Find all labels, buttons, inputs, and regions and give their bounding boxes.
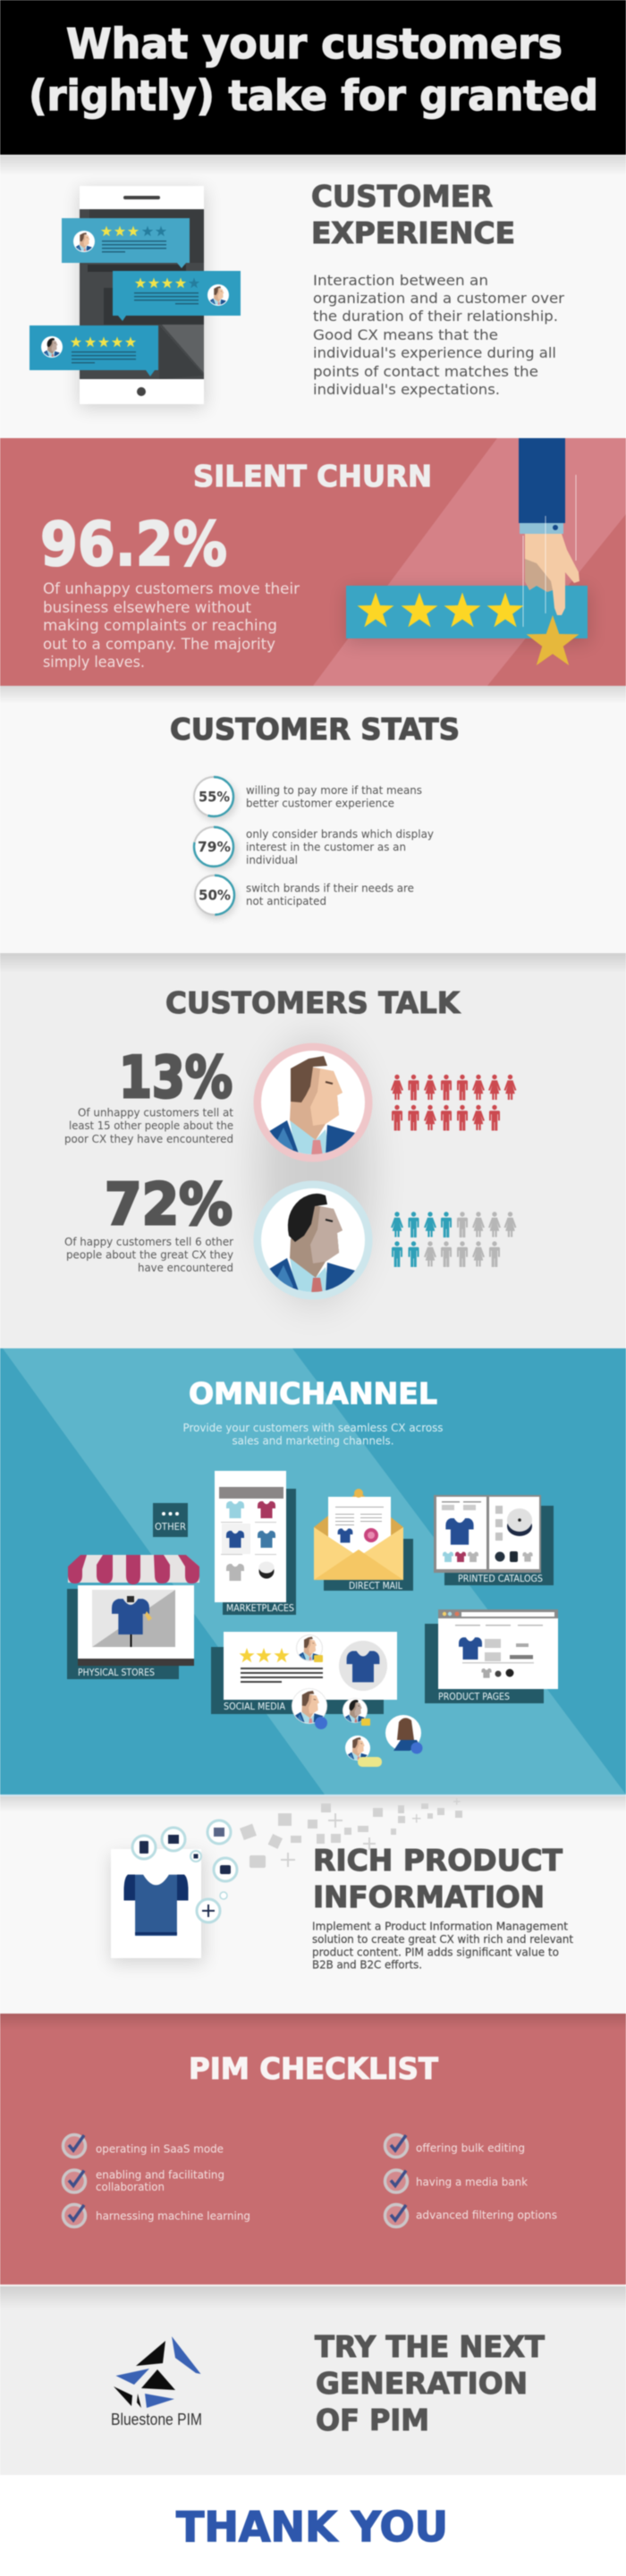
stat: 55%: 55%	[199, 789, 230, 805]
stat: 13% unhappy: 13%	[119, 1045, 233, 1111]
stat: 79%	[194, 827, 434, 871]
definition text: individual's experience during all	[313, 344, 556, 361]
header band	[0, 0, 626, 155]
channel: physical stores: PHYSICAL STORES	[78, 1668, 155, 1678]
panel: omnichannel	[0, 1348, 626, 1795]
call to action: TRY THE NEXT	[315, 2329, 545, 2364]
omnichannel description: sales and marketing channels.	[233, 1434, 393, 1447]
stat: 72% happy: Of happy customers tell 6 other	[64, 1235, 234, 1248]
definition text: organization and a customer over	[313, 290, 564, 307]
channel: printed catalogs: PRINTED CATALOGS	[458, 1574, 543, 1584]
rich product description: solution to create great CX with rich and relevant	[312, 1932, 573, 1946]
panel: customer experience	[0, 155, 626, 438]
definition text: Interaction between an	[313, 272, 488, 289]
stat: 79%: interest in the customer as an	[246, 840, 406, 853]
stat: 13% unhappy	[64, 1045, 233, 1145]
icon: hand dropping a star	[519, 438, 579, 665]
channel: other: OTHER	[155, 1522, 186, 1533]
rating bar with stars	[346, 586, 589, 643]
content icons orbiting the product	[132, 1820, 237, 1922]
customer avatars with reactions	[292, 1688, 422, 1767]
stat: 50%: 50%	[199, 887, 231, 903]
heading: customer experience: CUSTOMER	[311, 179, 493, 214]
checklist left column: operating in SaaS mode	[96, 2142, 224, 2155]
stat: 13% unhappy: least 15 other people about the	[69, 1119, 233, 1132]
channel: marketplaces: MARKETPLACES	[226, 1603, 294, 1614]
stat: 55%	[194, 777, 422, 821]
checklist left column: collaboration	[96, 2180, 165, 2193]
definition text: Good CX means that the	[313, 326, 498, 343]
stat: 72% happy	[64, 1172, 234, 1274]
omnichannel description	[182, 1422, 444, 1447]
stat: 79%: only consider brands which display	[246, 828, 434, 840]
call to action: GENERATION	[316, 2366, 528, 2401]
checklist left column: harnessing machine learning	[96, 2209, 250, 2223]
stat: 13% unhappy: poor CX they have encountered	[64, 1132, 233, 1145]
churn description	[43, 580, 300, 671]
portrait: happy customer	[258, 1185, 368, 1296]
call to action	[315, 2329, 545, 2437]
stat: 55%: willing to pay more if that means	[246, 784, 422, 797]
review bubble: four stars	[113, 271, 241, 321]
panel: thank you	[0, 2475, 626, 2576]
checklist right column	[385, 2135, 557, 2226]
definition text	[313, 272, 564, 398]
channel: physical stores	[67, 1555, 199, 1679]
stat: 72% happy: 72%	[105, 1172, 233, 1238]
title	[29, 20, 598, 120]
rich product description	[312, 1919, 573, 1971]
stat: 79%: 79%	[198, 839, 231, 855]
heading: silent churn: SILENT CHURN	[193, 459, 432, 494]
review bubble: five stars	[30, 325, 158, 376]
rich product description: product content. PIM adds significant value to	[312, 1946, 559, 1958]
checklist right column: advanced filtering options	[416, 2209, 557, 2221]
heading: customer stats: CUSTOMER STATS	[170, 712, 460, 747]
panel: try the next generation	[0, 2285, 626, 2475]
churn description: simply leaves.	[43, 654, 145, 671]
definition text: individual's expectations.	[313, 381, 500, 398]
call to action: OF PIM	[316, 2403, 429, 2437]
churn description: business elsewhere without	[43, 599, 251, 617]
big stat: 96.2%	[40, 510, 227, 580]
channel: social media	[211, 1632, 397, 1714]
panel: silent churn	[0, 438, 626, 686]
logo: bluestone pim	[111, 2336, 202, 2428]
stat: 50%: not anticipated	[246, 895, 326, 908]
channel: printed catalogs	[434, 1495, 554, 1585]
channel: other	[153, 1503, 188, 1537]
checklist left column	[63, 2135, 250, 2226]
phone with review bubbles	[30, 186, 241, 408]
stat: 72% happy: people about the great CX they	[66, 1248, 234, 1261]
stat: 55%: better customer experience	[246, 798, 394, 810]
definition text: points of contact matches the	[313, 363, 538, 380]
panel: customer stats	[0, 686, 626, 953]
product card with t-shirt	[111, 1849, 204, 1964]
logo: bluestone pim: Bluestone PIM	[111, 2411, 202, 2428]
channel: social media: SOCIAL MEDIA	[224, 1702, 286, 1712]
channel: direct mail	[314, 1489, 413, 1592]
channel: direct mail: DIRECT MAIL	[349, 1581, 402, 1592]
churn description: out to a company. The majority	[43, 636, 275, 654]
rich product description: Implement a Product Information Management	[312, 1919, 568, 1933]
pictogram: 6 of 15 teal people	[391, 1212, 517, 1267]
title: (rightly) take for granted	[29, 72, 598, 120]
stat: 50%	[195, 875, 414, 919]
heading: rich product information: INFORMATION	[313, 1879, 545, 1914]
heading: customer experience	[311, 179, 515, 250]
heading: customer experience: EXPERIENCE	[311, 215, 515, 250]
closing message: THANK YOU	[176, 2503, 448, 2551]
heading: rich product information	[313, 1843, 563, 1914]
channel: product pages: PRODUCT PAGES	[438, 1692, 510, 1702]
heading: omnichannel: OMNICHANNEL	[189, 1376, 437, 1411]
panel: customers talk	[0, 953, 626, 1348]
checklist right column: having a media bank	[416, 2175, 529, 2189]
scattered content icons	[240, 1798, 462, 1868]
checklist right column: offering bulk editing	[416, 2141, 525, 2155]
checklist left column: enabling and facilitating	[96, 2167, 224, 2182]
churn description: Of unhappy customers move their	[43, 580, 300, 598]
portrait: unhappy customer	[258, 1047, 368, 1158]
churn description: making complaints or reaching	[43, 617, 277, 635]
stat: 13% unhappy: Of unhappy customers tell at	[78, 1105, 233, 1119]
panel: pim checklist	[0, 2014, 626, 2285]
pictogram: 15 red people	[391, 1075, 517, 1130]
stat: 72% happy: have encountered	[138, 1261, 233, 1274]
omnichannel description: Provide your customers with seamless CX across	[182, 1422, 444, 1434]
stat: 50%: switch brands if their needs are	[246, 882, 414, 894]
channel: marketplaces	[215, 1471, 296, 1615]
channel: product pages	[425, 1609, 558, 1703]
panel: rich product information	[0, 1795, 626, 2014]
heading: rich product information: RICH PRODUCT	[313, 1843, 563, 1878]
heading: customers talk: CUSTOMERS TALK	[165, 985, 461, 1020]
review bubble: three stars	[62, 218, 190, 268]
stat: 79%: individual	[246, 854, 298, 866]
title: What your customers	[66, 20, 563, 68]
rich product description: B2B and B2C efforts.	[312, 1958, 422, 1971]
heading: pim checklist: PIM CHECKLIST	[189, 2051, 438, 2086]
definition text: the duration of their relationship.	[313, 308, 558, 325]
